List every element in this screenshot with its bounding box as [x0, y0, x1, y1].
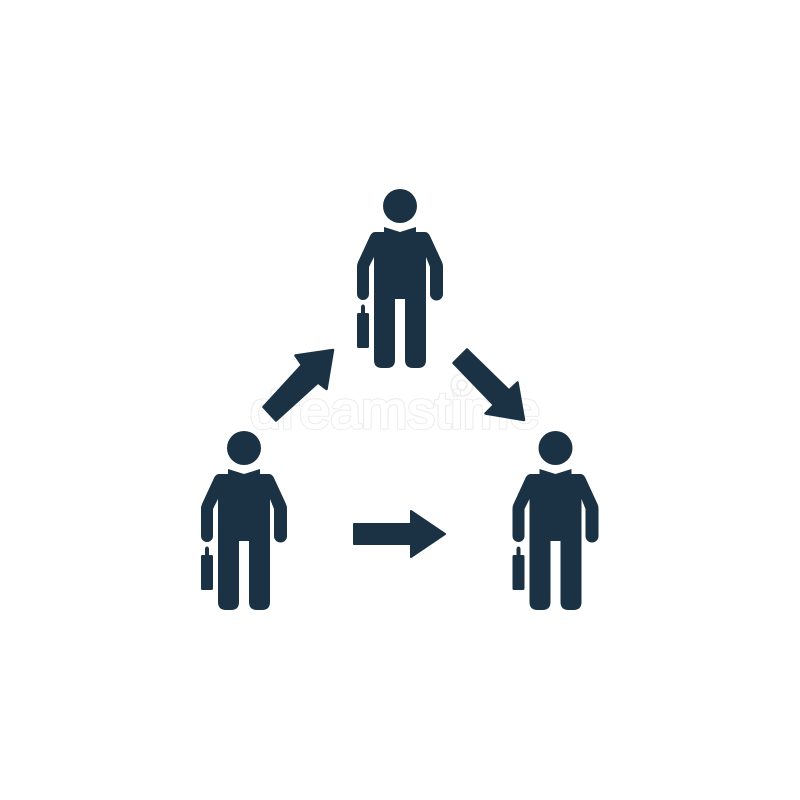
arrow: down-right from top person to right person	[454, 350, 524, 420]
person: bottom left	[201, 431, 287, 610]
arrow: right from left person to right person	[354, 511, 445, 557]
watermark: dreamstime	[250, 382, 540, 440]
person: bottom right	[512, 431, 598, 610]
person: top	[357, 189, 443, 368]
arrow: up-right from left person to top person	[264, 350, 333, 420]
watermark: dreamstime	[250, 382, 540, 440]
